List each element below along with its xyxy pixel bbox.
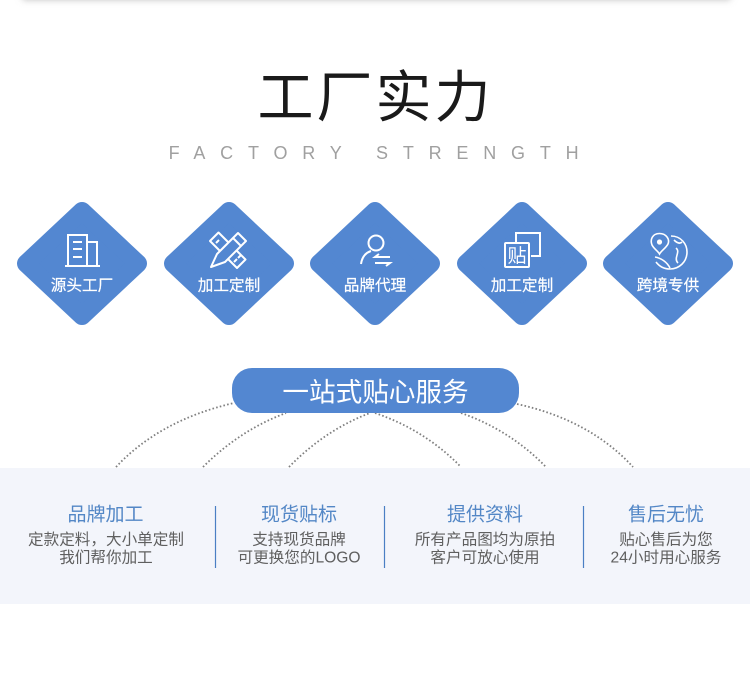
icon: sticker: 贴 xyxy=(507,245,527,267)
service: 售后无忧: 24小时用心服务 xyxy=(611,548,721,566)
label: 加工定制 xyxy=(198,276,260,294)
icon: ruler and pencil xyxy=(210,232,246,268)
service: 现货贴标: 可更换您的LOGO xyxy=(237,548,361,566)
service: 提供资料: 提供资料 xyxy=(447,504,523,526)
service: 售后无忧: 贴心售后为您 xyxy=(619,530,713,548)
service pill xyxy=(232,368,519,413)
panel: services band xyxy=(0,468,750,604)
icon: building xyxy=(65,235,100,266)
service: 品牌加工: 品牌加工 xyxy=(67,504,144,526)
dotted arcs xyxy=(116,403,633,467)
subtitle: FACTORY STRENGTH xyxy=(169,143,593,163)
service: 提供资料: 所有产品图均为原拍 xyxy=(415,530,555,548)
panel: 源头工厂 xyxy=(26,211,138,316)
service: 现货贴标: 现货贴标 xyxy=(261,504,337,526)
panel: 加工定制 sticker xyxy=(466,211,578,316)
panel: 加工定制 xyxy=(173,211,285,316)
service: 品牌加工 xyxy=(28,504,184,566)
title: 工厂实力 xyxy=(258,66,494,129)
service: 现货贴标: 支持现货品牌 xyxy=(252,530,346,548)
service: 品牌加工: 定款定料，大小单定制 xyxy=(28,530,184,548)
service: 提供资料: 客户可放心使用 xyxy=(430,548,540,566)
icon: globe with pin xyxy=(651,234,687,269)
label: 品牌代理 xyxy=(344,276,407,294)
service pill: 一站式贴心服务 xyxy=(282,378,469,408)
label: 源头工厂 xyxy=(51,276,113,294)
panel: 跨境专供 xyxy=(612,211,724,316)
label: 加工定制 xyxy=(491,276,553,294)
label: 跨境专供 xyxy=(637,276,699,294)
service: 提供资料 xyxy=(415,504,555,566)
icon: person with arrows xyxy=(361,236,390,266)
service: 现货贴标 xyxy=(237,504,361,566)
panel: 品牌代理 xyxy=(319,211,431,316)
service: 售后无忧: 售后无忧 xyxy=(628,504,704,526)
service: 品牌加工: 我们帮你加工 xyxy=(59,548,153,566)
service: 售后无忧 xyxy=(611,504,721,566)
